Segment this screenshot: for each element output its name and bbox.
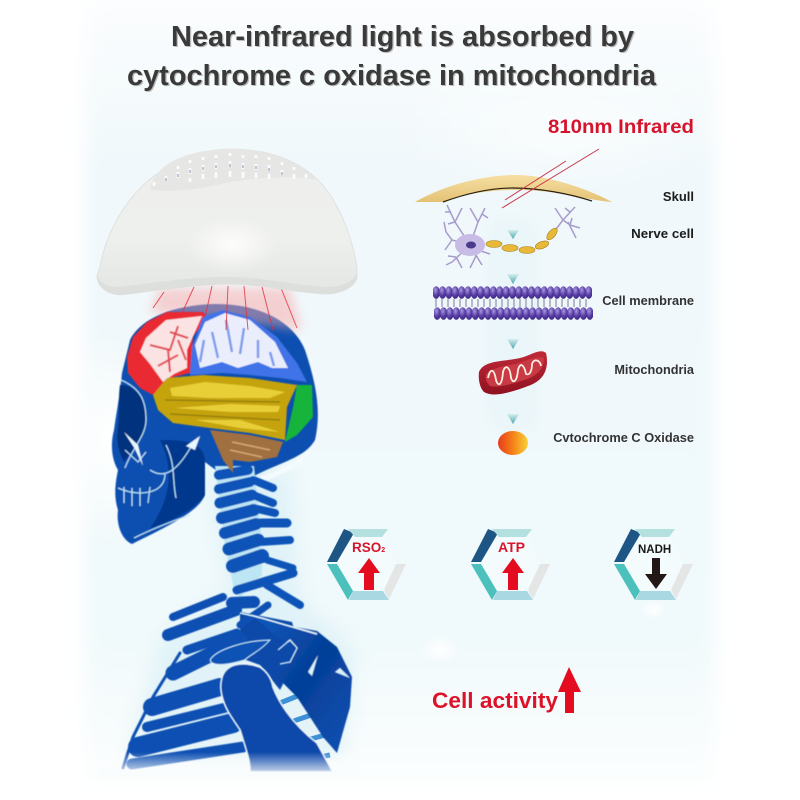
nerve cell: [444, 205, 580, 268]
red light beams: [150, 288, 302, 330]
red light rays: [153, 286, 297, 330]
title: Near-infrared light is absorbed by: [171, 21, 634, 53]
torso fill: [232, 612, 300, 690]
cerebellum brown: [210, 430, 283, 473]
cell activity callout: [432, 667, 581, 713]
frontal lobe red: [127, 312, 207, 395]
skeleton glow: [125, 470, 355, 760]
title: cytochrome c oxidase in mitochondria: [127, 60, 657, 92]
hexagon: NADH: [614, 529, 693, 600]
pathway glow: [490, 220, 536, 430]
title: [127, 21, 658, 93]
cell activity callout: Cell activity: [432, 688, 558, 713]
helmet vent holes: [154, 153, 306, 186]
hexagon: RSO2: RSO2: [352, 540, 385, 555]
pathway labels: Mitochondria: [614, 363, 695, 377]
humerus: [210, 640, 333, 772]
eye socket and cheek: [117, 385, 146, 462]
brain: [127, 310, 313, 473]
arrow: up: [558, 667, 581, 713]
lower right ribs: [275, 695, 330, 762]
pathway labels: Nerve cell: [631, 226, 694, 241]
cytochrome c oxidase: [498, 431, 528, 455]
pathway labels: Skull: [663, 189, 694, 204]
pathway labels: Cvtochrome C Oxidase: [553, 430, 694, 445]
occipital lobe green: [285, 385, 313, 442]
title: cytochrome c oxidase in mitochondria: [128, 61, 658, 93]
clavicle and ribs: [123, 597, 268, 768]
hexagon: NADH: NADH: [638, 544, 671, 556]
pathway diagram: [415, 149, 695, 455]
pathway labels: [553, 189, 695, 445]
hexagon: ATP: ATP: [498, 539, 525, 555]
bottom fade: [100, 752, 360, 778]
skull: [112, 304, 318, 544]
helmet: [97, 149, 357, 295]
label: 810nm Infrared: 810nm Infrared: [548, 116, 694, 138]
skeleton figure: [100, 304, 360, 778]
parietal lobe blue: [190, 310, 307, 382]
hexagon: RSO2: [327, 529, 406, 600]
title: Near-infrared light is absorbed by: [172, 22, 635, 54]
temporal lobe yellow: [153, 375, 297, 440]
hexagon: ATP: [471, 529, 550, 600]
pathway labels: Cell membrane: [602, 293, 694, 308]
white swoosh behind jaw: [258, 448, 312, 482]
skull layer: [415, 175, 612, 202]
infrared beams: [502, 149, 599, 208]
cell membrane: [433, 286, 593, 320]
teal down arrows: [507, 230, 519, 424]
spine: [215, 466, 300, 605]
mitochondria: [479, 351, 547, 394]
shoulder blade: [240, 613, 352, 753]
